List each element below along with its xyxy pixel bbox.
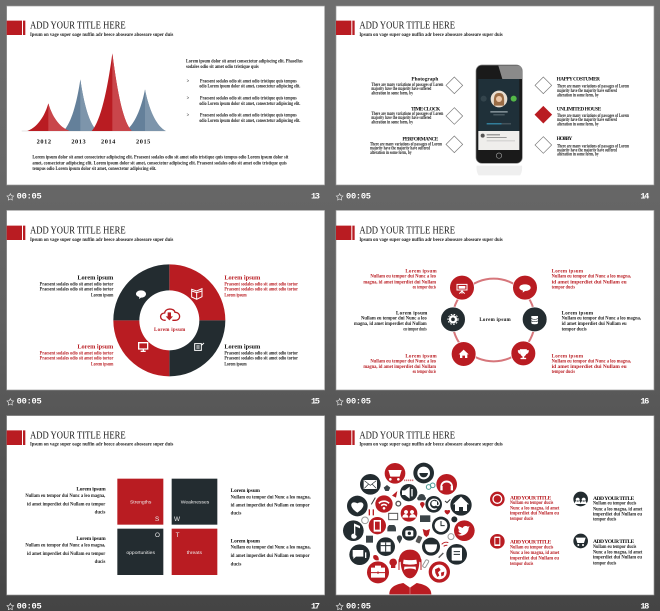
subtitle: Ipsum on vage super oage nuffin adr beece aboseare aboseare super duis (359, 33, 503, 38)
item: red bottom (490, 534, 560, 567)
icon: box (192, 289, 202, 299)
ring (452, 279, 535, 361)
label: middle left: eu tempor ducis (403, 327, 427, 332)
chart: peaks (22, 53, 166, 131)
text: top left: Lorem ipsum (76, 487, 106, 493)
icon: star (336, 194, 343, 200)
item: dark top: tempor ducis (593, 518, 616, 523)
label: top left: Lorem ipsum (91, 293, 113, 298)
item: dark bottom: Nullam eu tempor ducis (593, 545, 636, 550)
subtitle: Ipsum on vage super oage nuffin adr beece aboseare aboseare super duis (30, 238, 174, 243)
badge glyphs (351, 467, 470, 579)
label: top right: Lorem ipsum (224, 275, 261, 282)
left labels: majority have the majority have suffered (370, 147, 430, 152)
label: bottom left: eu tempor ducis (413, 370, 436, 375)
left labels: majority have the majority have suffered (371, 87, 432, 92)
text: top left: id amet imperdiet dui Nullam eu tempor (27, 502, 105, 507)
small floating icons (362, 480, 457, 568)
subtitle: Ipsum on vage super oage nuffin adr beece aboseare aboseare super duis (359, 443, 503, 448)
label: top left: Lorem ipsum (77, 275, 114, 282)
left labels: PERFORMANCE (402, 136, 439, 142)
left labels: Photograph (411, 77, 438, 83)
label: bottom right: Nullam eu tempor dui Nunc a leo magna, (552, 359, 631, 364)
icon: notepad (195, 343, 204, 350)
year labels (37, 138, 150, 145)
icon: star (7, 399, 14, 405)
label: bottom right: tempor ducis (552, 370, 575, 375)
label: bottom right: Lorem ipsum (224, 362, 247, 367)
node: presentation (450, 275, 474, 300)
icon: star (336, 399, 343, 405)
icon: monitor (139, 343, 148, 351)
text: top left: ducis (95, 510, 106, 515)
text: bottom left: id amet imperdiet dui Nullam eu tempor (27, 552, 105, 557)
square: weaknesses (172, 479, 217, 525)
square: opportunities: opportunities (126, 550, 155, 556)
right text block: Praesent sodales odio sit amet odio tristique quis tempus (200, 114, 297, 119)
item: dark top: ADD YOUR TITLE (593, 496, 635, 502)
text: top right: Nullam eu tempor dui Nunc a leo magna, (231, 495, 311, 500)
header block (336, 430, 355, 445)
title: ADD YOUR TITLE HERE (30, 20, 126, 32)
square: threats: threats (187, 550, 202, 556)
item: red bottom: ADD YOUR TITLE (510, 540, 552, 546)
left labels: There are many variations of passages of Lorem (371, 112, 443, 117)
text: bottom left: Lorem ipsum (76, 536, 106, 542)
donut center label: Lorem ipsum (154, 328, 186, 333)
label: middle left (354, 311, 428, 332)
square: weaknesses: Weaknesses (181, 500, 210, 506)
item: dark top (573, 492, 643, 523)
label: top right (552, 270, 631, 290)
left labels: majority have the majority have suffered (371, 116, 432, 121)
label: top left: Lorem ipsum (405, 270, 438, 275)
header block (7, 430, 25, 445)
square: threats: T (176, 532, 180, 539)
item: red bottom: Nullam eu tempor ducis (510, 546, 553, 551)
year labels: 2015 (136, 138, 150, 145)
title: ADD YOUR TITLE HERE (359, 429, 455, 441)
bottom text block: amet, consectetur adipiscing elit. Lorem ipsum dolor sit amet, consectetur adipiscing elit. Praesent sodales odio sit amet odio tristique quis (32, 161, 287, 166)
right labels: majority have the majority have suffered (557, 148, 617, 153)
label: top right: Praesent sodales odio sit amet odio tortor (224, 282, 298, 287)
right labels (557, 77, 629, 158)
subtitle: Ipsum on vage super oage nuffin adr beece aboseare aboseare super duis (30, 443, 174, 448)
right labels: There are many variations of passages of Lorem (557, 114, 629, 119)
icon: speech bubble (136, 290, 146, 299)
label: bottom left: Lorem ipsum (91, 362, 113, 367)
donut chart (113, 264, 225, 376)
item: red top: tempor ducis (510, 517, 533, 522)
right text block: Praesent sodales odio sit amet odio tristique quis tempus (200, 80, 297, 85)
text: bottom left (25, 536, 106, 565)
text: top right (231, 488, 311, 517)
icon cloud: red badges (367, 463, 475, 583)
item: dark top: imperdiet dui Nullam eu (593, 512, 642, 517)
item: red bottom: imperdiet dui Nullam eu (510, 556, 559, 561)
label: bottom left: Lorem ipsum (405, 354, 438, 359)
label: bottom left (40, 344, 114, 367)
left labels: TIME CLOCK (411, 106, 441, 112)
right labels: UNLIMITED HOUSE (557, 106, 602, 112)
text: bottom right: id amet imperdiet dui Nullam eu tempor (231, 554, 310, 559)
label: bottom right: Lorem ipsum (552, 354, 584, 359)
subtitle: Ipsum on vage super oage nuffin adr beece aboseare aboseare super duis (359, 238, 503, 243)
right text block: > (187, 114, 190, 119)
right text block: > (187, 97, 190, 102)
header block (7, 226, 25, 240)
year labels: 2013 (71, 138, 86, 145)
header block (336, 21, 355, 35)
right labels: alteration in some form, by (557, 153, 599, 158)
label: top right: Praesent sodales odio sit amet odio tortor (224, 288, 298, 293)
item: red top (490, 492, 560, 522)
item: red top: ADD YOUR TITLE (510, 495, 552, 501)
label: middle left: Nullam eu tempor dui Nunc a leo (361, 317, 427, 322)
left labels: alteration in some form, by (371, 91, 414, 96)
square: weaknesses: W (174, 516, 180, 523)
footer: slide number: 13 (311, 192, 320, 202)
right text block: odio Lorem ipsum dolor sit amet, consectetur adipiscing elit. (199, 119, 300, 124)
label: bottom right (552, 354, 631, 375)
left labels: alteration in some form, by (371, 121, 414, 126)
text: bottom left: ducis (95, 560, 106, 565)
label: bottom right: id amet imperdiet dui Nullam eu (552, 365, 627, 370)
item: red bottom: tempor ducis (510, 562, 533, 567)
bottom text block (32, 156, 289, 172)
panel: slide 15 donut (7, 210, 325, 407)
item: red bottom: Nunc a leo magna, id amet (510, 551, 560, 556)
label: top right: Nullam eu tempor dui Nunc a leo magna, (552, 275, 631, 280)
diamonds (446, 77, 552, 153)
label: bottom right: Praesent sodales odio sit amet odio tortor (224, 357, 298, 362)
label: bottom left: Lorem ipsum (77, 344, 114, 351)
right labels: There are many variations of passages of Lorem (557, 85, 629, 90)
item: dark top: Nunc a leo magna, id amet (593, 507, 643, 512)
item: red top: imperdiet dui Nullam eu (510, 512, 559, 517)
label: bottom left (363, 354, 438, 375)
title: ADD YOUR TITLE HERE (359, 225, 455, 237)
footer: timer: 00:05 (346, 397, 371, 407)
square: opportunities (117, 529, 163, 575)
right labels: majority have the majority have suffered (557, 89, 617, 94)
label: middle right: Nullam eu tempor dui Nunc a leo magna, (562, 317, 641, 322)
label: middle right: id amet imperdiet dui Nullam eu (562, 322, 627, 327)
subtitle: Ipsum on vage super oage nuffin adr beece aboseare aboseare super duis (30, 33, 174, 38)
right labels: HOBBY (557, 136, 572, 142)
label: top left: Nullam eu tempor dui Nunc a leo (370, 275, 437, 280)
node: trophy (511, 341, 536, 366)
square: opportunities: O (155, 532, 160, 539)
panel: slide 16 cycle (336, 210, 654, 407)
text: top left (25, 487, 106, 515)
right text block: odio Lorem ipsum dolor sit amet, consectetur adipiscing elit. (199, 85, 300, 90)
text: bottom right: ducis (231, 562, 242, 567)
icon cloud: dark badges (343, 463, 472, 565)
right text block: Praesent sodales odio sit amet odio tristique quis tempus (200, 97, 297, 102)
footer: slide number: 16 (640, 397, 649, 407)
label: top left: magna, id amet imperdiet dui Nullam (363, 280, 436, 285)
panel: slide 17 SWOT (7, 416, 325, 611)
header block (336, 226, 355, 240)
square: strengths (117, 479, 163, 525)
item: red top: Nunc a leo magna, id amet (510, 507, 560, 512)
text: top left: Nullam eu tempor dui Nunc a leo magna, (25, 494, 105, 499)
right text block: sodales odio sit amet odio tristique quis (186, 65, 259, 70)
item: dark bottom: imperdiet dui Nullam eu (593, 556, 642, 561)
icon: cloud download (161, 309, 180, 320)
right text block: > (187, 80, 190, 85)
node: home (451, 342, 476, 366)
text: top right: ducis (231, 512, 242, 517)
label: middle right (562, 311, 641, 332)
bottom text block: Lorem ipsum dolor sit amet consectetur adipiscing elit. Praesent sodales odio sit amet odio tristique quis tempus odio Lorem ipsum dolor sit (32, 156, 289, 161)
label: middle left: Lorem ipsum (396, 311, 428, 316)
square: strengths: Strengths (130, 500, 152, 506)
year labels: 2012 (37, 138, 51, 145)
label: top right: Lorem ipsum (224, 293, 247, 298)
icon: star (7, 194, 14, 200)
icon: star (336, 603, 343, 610)
label: top right: id amet imperdiet dui Nullam eu (552, 280, 627, 285)
footer: slide number: 15 (311, 397, 320, 407)
label: middle right: tempor ducis (562, 327, 587, 332)
label: top left: eu tempor ducis (413, 285, 436, 290)
label: bottom right: Lorem ipsum (224, 344, 261, 351)
title: ADD YOUR TITLE HERE (359, 20, 455, 32)
person with headset (389, 550, 431, 594)
node: database (522, 307, 547, 332)
panel: slide 13 area chart (7, 6, 325, 202)
left labels (370, 77, 443, 156)
label: bottom left: Nullam eu tempor dui Nunc a leo (370, 359, 437, 364)
item: dark bottom: Nunc a leo magna, id amet (593, 550, 643, 555)
text: bottom right (231, 538, 311, 567)
right text block (186, 59, 303, 124)
footer: timer: 00:05 (17, 397, 42, 407)
left labels: There are many variations of passages of Lorem (370, 143, 442, 148)
right text block: Lorem ipsum dolor sit amet consectetur adipiscing elit. Phasellus (186, 59, 303, 64)
text: top right: id amet imperdiet dui Nullam eu tempor (231, 504, 310, 509)
center label: Lorem ipsum (479, 318, 512, 323)
panel: slide 18 icon cloud (336, 416, 654, 611)
footer: timer: 00:05 (346, 192, 371, 202)
right labels: majority have the majority have suffered (557, 118, 617, 123)
footer: timer: 00:05 (17, 192, 42, 202)
square: strengths: S (155, 516, 159, 523)
bottom text block: tempus odio Lorem ipsum dolor sit amet, consectetur adipiscing elit. (32, 167, 156, 172)
label: bottom left: Praesent sodales odio sit amet odio tortor (40, 351, 113, 356)
right labels: HAPPY COSTUMER (557, 77, 600, 83)
label: bottom left: magna, id amet imperdiet dui Nullam (363, 365, 436, 370)
footer: slide number: 14 (640, 192, 649, 202)
right text block: odio Lorem ipsum dolor sit amet, consectetur adipiscing elit. (199, 102, 300, 107)
label: top left (363, 270, 438, 290)
label: top left (40, 275, 114, 298)
label: bottom right: Praesent sodales odio sit amet odio tortor (224, 351, 298, 356)
year labels: 2014 (101, 138, 116, 145)
square: threats (172, 529, 217, 575)
label: top right: tempor ducis (552, 285, 575, 290)
node: gear (441, 307, 465, 332)
right labels: alteration in some form, by (557, 93, 599, 98)
panel: slide 14 phone (336, 6, 654, 202)
left labels: There are many variations of passages of Lorem (371, 83, 443, 88)
right labels: alteration in some form, by (557, 122, 599, 127)
title: ADD YOUR TITLE HERE (30, 429, 126, 441)
label: top right: Lorem ipsum (552, 270, 584, 275)
left labels: alteration in some form, by (370, 151, 412, 156)
item: red top: Nullam eu tempor ducis (510, 501, 553, 506)
item: dark top: Nullam eu tempor ducis (593, 502, 636, 507)
text: bottom right: Nullam eu tempor dui Nunc a leo magna, (231, 546, 311, 551)
label: bottom left: Praesent sodales odio sit amet odio tortor (40, 357, 113, 362)
text: top right: Lorem ipsum (231, 488, 261, 494)
phone (476, 65, 522, 175)
label: top right (224, 275, 298, 298)
icon: star (7, 603, 14, 610)
label: middle right: Lorem ipsum (562, 311, 594, 316)
label: bottom right (224, 344, 298, 367)
text: bottom right: Lorem ipsum (231, 538, 261, 544)
item: dark bottom (573, 534, 643, 566)
label: middle left: magna, id amet imperdiet dui Nullam (354, 322, 427, 327)
header block (7, 21, 25, 35)
item: dark bottom: ADD YOUR TITLE (593, 539, 635, 545)
label: top left: Praesent sodales odio sit amet odio tortor (40, 288, 113, 293)
title: ADD YOUR TITLE HERE (30, 225, 126, 237)
node: chat (513, 275, 537, 300)
label: top left: Praesent sodales odio sit amet odio tortor (40, 282, 113, 287)
right labels: There are many variations of passages of Lorem (557, 144, 629, 149)
text: bottom left: Nullam eu tempor dui Nunc a leo magna, (25, 544, 105, 549)
item: dark bottom: tempor ducis (593, 561, 616, 566)
